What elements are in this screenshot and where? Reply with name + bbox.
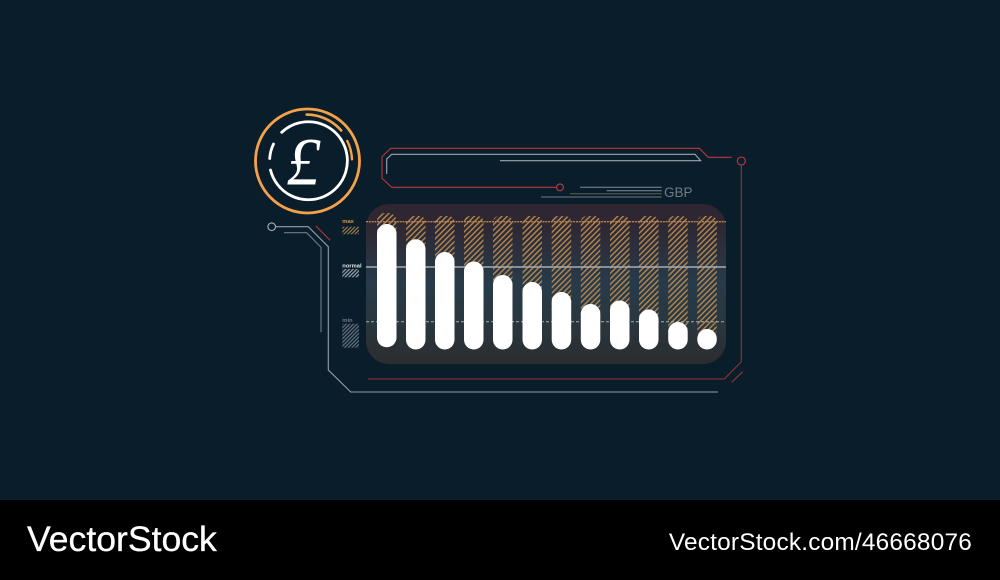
image reference: VectorStock.com/46668076 (669, 529, 972, 556)
threshold line: normal (366, 266, 726, 268)
legend (342, 219, 362, 348)
icon: pound coin (256, 109, 360, 213)
bar chart: white bars (377, 224, 717, 350)
left circuit lines (268, 223, 718, 392)
panel: chart background (366, 204, 726, 364)
threshold line: max (366, 221, 726, 223)
GBP label with lines (541, 185, 693, 200)
threshold line: min (366, 321, 726, 323)
GBP label with lines: GBP (664, 185, 693, 200)
legend: min: min (342, 318, 353, 324)
icon: pound coin: £ (286, 124, 322, 200)
footer bar (0, 500, 1000, 580)
legend: max: max (342, 219, 355, 225)
legend: normal: normal (342, 264, 362, 270)
brand name: VectorStock (27, 519, 217, 559)
top right frame (368, 148, 745, 382)
bar chart: hatched ranges (377, 213, 717, 336)
